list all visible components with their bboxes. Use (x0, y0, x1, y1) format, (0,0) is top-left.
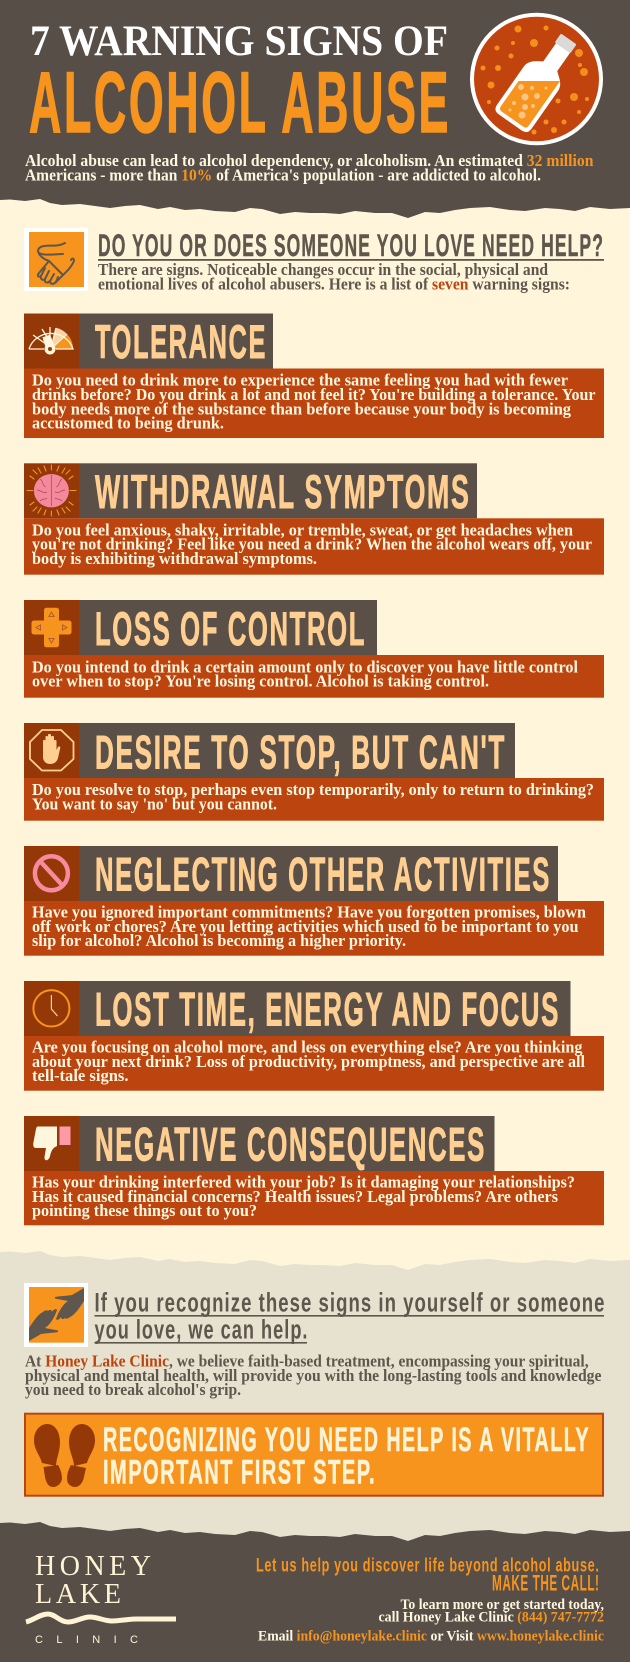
callout text (103, 1421, 590, 1491)
desire to stop text (32, 780, 594, 813)
panel: desire to stop (24, 723, 604, 821)
lost time text: about your next drink? Loss of productivity, promptness, and perspective are all (32, 1052, 585, 1071)
withdrawal text: body is exhibiting withdrawal symptoms. (32, 549, 317, 568)
heading: we can help: you love, we can help. (94, 1315, 308, 1345)
help paragraph (25, 1352, 602, 1399)
neglecting text: slip for alcohol? Alcohol is becoming a higher priority. (32, 931, 406, 950)
help paragraph: At Honey Lake Clinic, we believe faith-based treatment, encompassing your spiritual, (25, 1352, 589, 1371)
footer call to action (256, 1555, 600, 1596)
header band (0, 0, 630, 218)
icon: shaking hands (24, 228, 88, 291)
panel: negative consequences (24, 1116, 604, 1225)
loss of control text (32, 657, 578, 691)
beige lower section background (0, 1251, 630, 1662)
panel: tolerance (24, 314, 604, 438)
intro paragraph: Alcohol abuse can lead to alcohol dependency, or alcoholism. An estimated 32 million (25, 151, 593, 170)
withdrawal text: Do you feel anxious, shaky, irritable, or tremble, sweat, or get headaches when (32, 520, 573, 539)
intro paragraph: Americans - more than 10% of America's population - are addicted to alcohol. (25, 165, 541, 184)
negative consequences text: Has your drinking interfered with your job? Is it damaging your relationships? (32, 1173, 575, 1192)
tolerance text: body needs more of the substance than before because your body is becoming (32, 399, 572, 418)
help intro block (24, 227, 604, 293)
icon: bottle in circle (470, 13, 603, 145)
icon: stop hand (30, 730, 74, 770)
logo: Honey Lake Clinic (26, 1551, 176, 1646)
neglecting text: off work or chores? Are you letting activities which used to be important to you (32, 917, 578, 936)
title line 1: 7 WARNING SIGNS OF (30, 18, 448, 65)
help intro text (98, 260, 570, 293)
panel: withdrawal symptoms (24, 463, 604, 575)
tolerance text: Do you need to drink more to experience the same feeling you had with fewer (32, 371, 569, 390)
footer (0, 1522, 630, 1662)
icon: reaching hands (24, 1283, 88, 1347)
desire to stop text: Do you resolve to stop, perhaps even stop temporarily, only to return to drinking? (32, 780, 594, 799)
loss of control text: Do you intend to drink a certain amount only to discover you have little control (32, 657, 578, 676)
tolerance text (32, 371, 596, 433)
panel: lost time, energy and focus (24, 981, 604, 1091)
contact details: call Honey Lake Clinic (844) 747-7772 (378, 1608, 604, 1625)
withdrawal text: you're not drinking? Feel like you need a drink? When the alcohol wears off, your (32, 535, 593, 554)
help paragraph: you need to break alcohol's grip. (25, 1380, 241, 1399)
lost time text (32, 1038, 585, 1085)
icon: prohibited sign (35, 856, 68, 890)
logo: Honey Lake Clinic: CLINIC (35, 1634, 138, 1646)
neglecting text (32, 903, 586, 950)
negative consequences text: Has it caused financial concerns? Health issues? Legal problems? Are others (32, 1187, 559, 1206)
loss of control text: over when to stop? You're losing control. Alcohol is taking control. (32, 672, 489, 691)
logo: Honey Lake Clinic: HONEY (35, 1551, 151, 1582)
contact details: Email info@honeylake.clinic or Visit www.honeylake.clinic (258, 1628, 604, 1645)
icon: thumbs down (33, 1126, 70, 1160)
withdrawal text (32, 520, 593, 568)
icon: clock (33, 990, 69, 1026)
panel: we can help (24, 1283, 606, 1399)
icon: directional pad (32, 608, 72, 647)
tolerance text: accustomed to being drunk. (32, 414, 224, 433)
intro paragraph (25, 151, 593, 184)
tolerance text: drinks before? Do you drink a lot and not feel it? You're building a tolerance. Your (32, 385, 596, 404)
heading: we can help (94, 1288, 606, 1345)
negative consequences text (32, 1173, 575, 1220)
contact details (258, 1596, 604, 1645)
desire to stop text: You want to say 'no' but you cannot. (32, 794, 277, 813)
icon: brain (27, 465, 76, 516)
neglecting text: Have you ignored important commitments? Have you forgotten promises, blown (32, 903, 586, 922)
negative consequences text: pointing these things out to you? (32, 1201, 257, 1220)
heading: loss of control: LOSS OF CONTROL (95, 603, 366, 656)
panel: neglecting other activities (24, 846, 604, 956)
logo: Honey Lake Clinic: LAKE (35, 1579, 121, 1610)
contact details: To learn more or get started today, (400, 1596, 604, 1613)
help paragraph: physical and mental health, will provide you with the long-lasting tools and knowledge (25, 1366, 602, 1385)
heading: tolerance: TOLERANCE (95, 316, 267, 369)
lost time text: Are you focusing on alcohol more, and less on everything else? Are you thinking (32, 1038, 583, 1057)
callout text: IMPORTANT FIRST STEP. (103, 1453, 376, 1491)
help intro text: There are signs. Noticeable changes occur in the social, physical and (98, 260, 549, 279)
callout: first step (25, 1414, 603, 1496)
icon: footprints (34, 1424, 95, 1487)
icon: gauge (29, 327, 73, 354)
lost time text: tell-tale signs. (32, 1066, 128, 1085)
help intro text: emotional lives of alcohol abusers. Here is a list of seven warning signs: (98, 274, 570, 293)
panel: loss of control (24, 600, 604, 698)
